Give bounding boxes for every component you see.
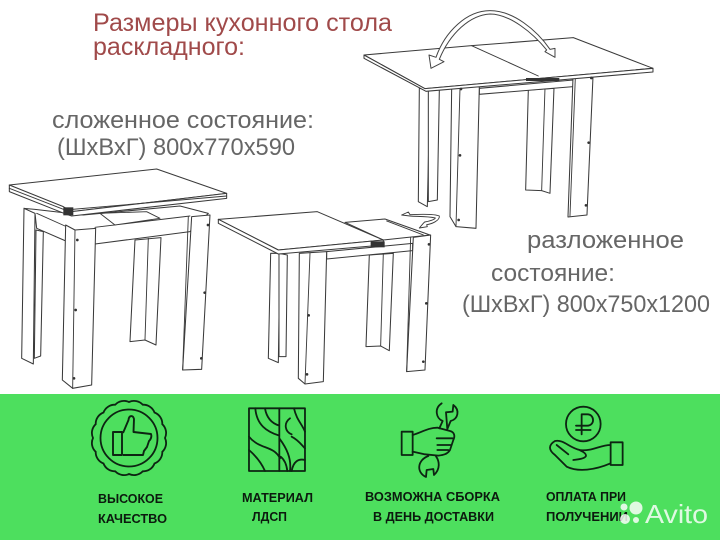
label: assembly [365, 489, 501, 524]
label: material [242, 490, 313, 524]
label: payment [546, 489, 628, 524]
label: payment: ОПЛАТА ПРИ [546, 489, 626, 504]
unfolded state caption: (ШхВхГ) 800х750х1200 [462, 291, 710, 318]
title: Размеры кухонного стола [93, 9, 392, 37]
label: material: МАТЕРИАЛ [242, 490, 313, 505]
label: high quality [98, 491, 167, 526]
label: high quality: КАЧЕСТВО [98, 511, 167, 526]
title [93, 9, 392, 61]
icon: chipboard wood grain [249, 408, 305, 471]
label: payment: ПОЛУЧЕНИИ [546, 509, 628, 524]
label: material: ЛДСП [252, 509, 287, 524]
folded state caption: (ШхВхГ) 800х770х590 [57, 134, 295, 161]
icon: quality badge with thumb up [92, 401, 166, 475]
table drawing: folded with top lifted [9, 169, 227, 388]
table drawing: folded, top rotated [218, 212, 439, 384]
icon: small rotation arrow [402, 212, 439, 228]
label: assembly: В ДЕНЬ ДОСТАВКИ [373, 509, 494, 524]
watermark: Avito [620, 499, 708, 529]
label: high quality: ВЫСОКОЕ [98, 491, 163, 506]
title: раскладного: [93, 33, 245, 61]
icon: hand with ruble coin [550, 407, 623, 470]
unfolded state caption [462, 227, 710, 318]
label: assembly: ВОЗМОЖНА СБОРКА [365, 489, 501, 504]
folded state caption [52, 107, 314, 161]
folded state caption: сложенное состояние: [52, 107, 314, 134]
watermark: Avito: Avito [645, 499, 708, 529]
icon: hand holding wrench [402, 403, 457, 477]
unfolded state caption: разложенное [527, 227, 684, 254]
unfolded state caption: состояние: [491, 260, 615, 287]
arrow: unfolding arc [429, 11, 555, 68]
green benefits band [0, 394, 720, 540]
table drawing: unfolded [364, 11, 653, 228]
